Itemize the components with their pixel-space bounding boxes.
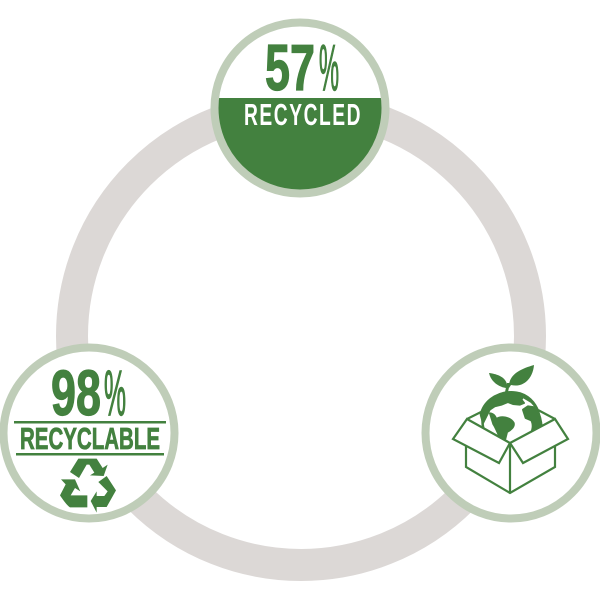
badge: box with globe — [426, 348, 596, 518]
top rule — [14, 421, 166, 424]
badge: 98% recyclable — [4, 348, 174, 518]
recyclable label: RECYCLABLE — [20, 421, 160, 456]
badge: 57% recycled: % — [319, 31, 339, 104]
large grey cycle ring — [72, 107, 530, 565]
icon: leaves — [489, 365, 534, 392]
recycled label: RECYCLED — [244, 99, 361, 132]
57 number: 57 — [265, 31, 315, 104]
bottom rule — [16, 453, 164, 456]
98 number: 98 — [51, 357, 101, 429]
badge: 57% recycled — [214, 22, 386, 194]
icon: open box — [453, 410, 568, 493]
icon: recycling arrows — [60, 459, 116, 513]
icon: globe — [481, 392, 542, 450]
badge: 98% recyclable: % — [104, 357, 126, 429]
